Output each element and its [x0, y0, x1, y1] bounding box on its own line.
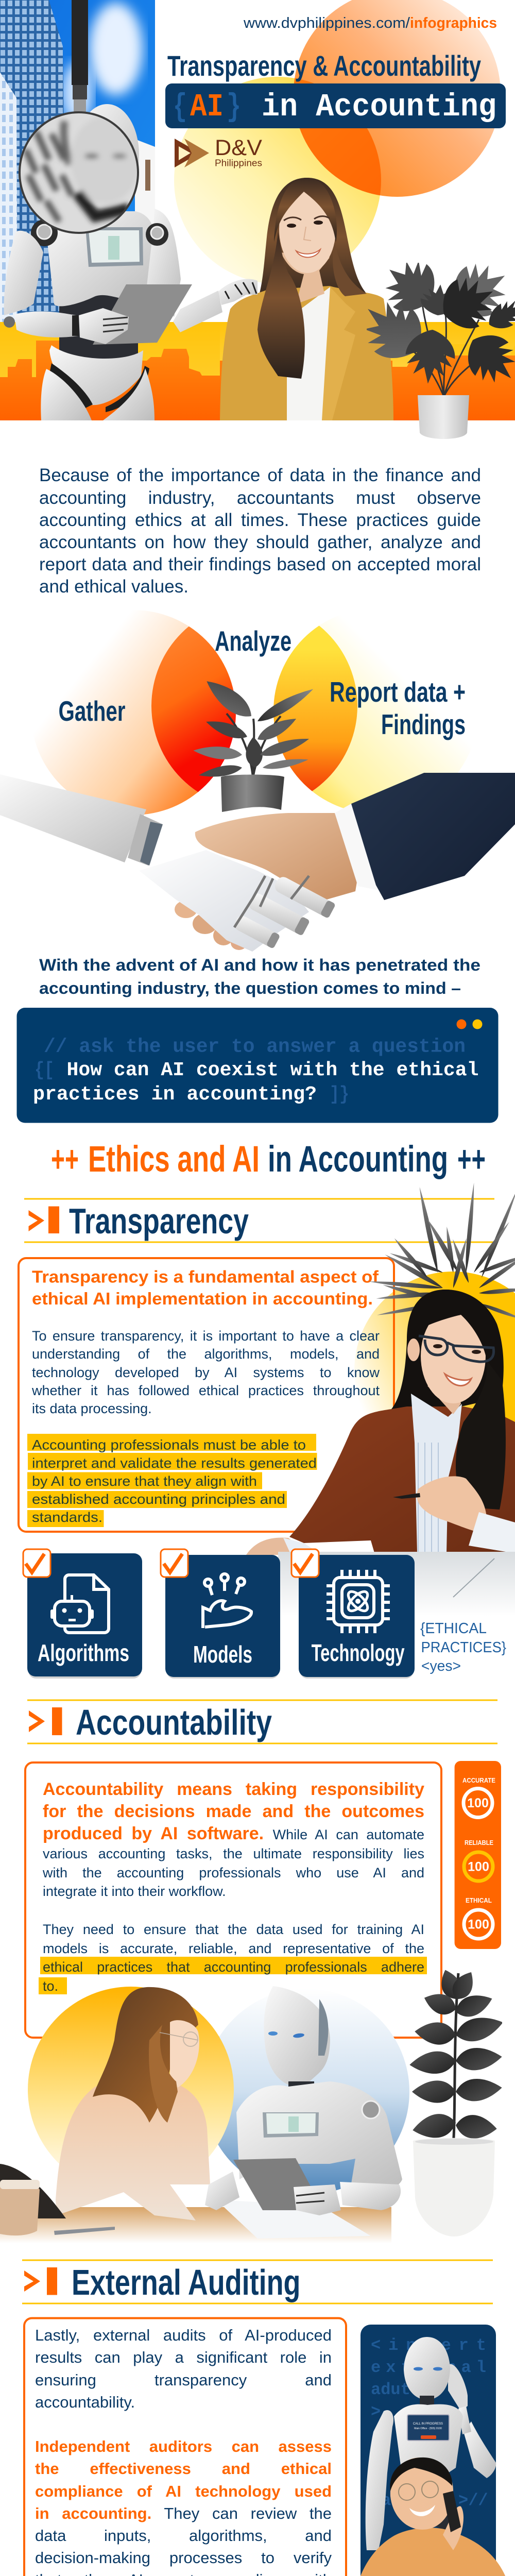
- heading: ethics and AI in accounting: Ethics and AI: [88, 1139, 260, 1180]
- intro paragraph: report data and their findings based on accepted moral: [39, 554, 481, 574]
- panel: transparency text: interpret and validate the results generated: [32, 1455, 317, 1471]
- panel: external auditing text: compliance of AI technology used: [35, 2482, 332, 2500]
- robot on phone card: Main Office - (555) 0100: [414, 2427, 442, 2430]
- robot on phone card: >: [371, 2402, 381, 2421]
- panel: external auditing text: results can play a significant role in: [35, 2348, 332, 2366]
- card: models: Models: [193, 1641, 252, 1668]
- question code box: How can AI coexist with the ethical: [67, 1059, 478, 1081]
- note: ethical practices yes: PRACTICES}: [421, 1639, 506, 1656]
- magnifying glass: [19, 0, 139, 234]
- question lead-in: accounting industry, the question comes to mind –: [39, 979, 461, 997]
- label: report data + findings: [330, 676, 466, 740]
- section heading: external auditing: [21, 2258, 494, 2306]
- hero robot with tablet: [4, 104, 258, 420]
- panel: accountability text: produced by AI software. While AI can automate: [43, 1824, 424, 1843]
- robot on phone card: e x t e r n a l: [371, 2358, 486, 2377]
- section heading: transparency: [24, 1198, 494, 1243]
- intro paragraph: accounting industry, accountants must observe: [39, 487, 481, 508]
- robot on phone card: CALL IN PROGRESS: [413, 2422, 443, 2426]
- panel: accountability text: for the decisions made and the outcomes: [43, 1802, 424, 1821]
- panel: accountability text: to.: [43, 1978, 58, 1994]
- section heading: external auditing: External Auditing: [72, 2262, 301, 2302]
- hero monstera plant in pot: [367, 263, 515, 439]
- hero photo: city sky and buildings: [0, 0, 155, 322]
- panel: transparency text: [18, 1257, 395, 1533]
- question code box: practices in accounting?: [33, 1083, 317, 1106]
- logo: D&V Philippines: [175, 137, 262, 168]
- venn circles: gather, analyze, report: [36, 611, 468, 815]
- panel: external auditing text: accountability.: [35, 2393, 135, 2411]
- handshake: robot and human: [0, 773, 515, 952]
- panel: external auditing text: in accounting. They can review the: [35, 2504, 332, 2522]
- note: ethical practices yes: {ETHICAL: [420, 1620, 487, 1637]
- website url: infographics: [410, 15, 497, 31]
- robot on phone card: >//: [458, 2491, 488, 2510]
- robot on phone card: a: [381, 2491, 391, 2510]
- section heading: accountability: Accountability: [76, 1702, 272, 1742]
- title: in Accounting: [262, 89, 496, 125]
- panel: accountability text: They need to ensure that the data used for training AI: [43, 1922, 424, 1937]
- card: models: [160, 1549, 280, 1679]
- note: ethical practices yes: [420, 1620, 506, 1674]
- woman with glasses and pen: [246, 1290, 515, 1555]
- question lead-in: With the advent of AI and how it has penetrated the: [39, 956, 480, 974]
- panel: external auditing text: data inputs, algorithms, and: [35, 2527, 332, 2545]
- robot on phone card: < i n s e r t: [371, 2336, 486, 2355]
- orange scorecard: accurate, reliable, ethical: RELIABLE: [465, 1839, 493, 1846]
- orange scorecard: accurate, reliable, ethical: ACCURATE: [462, 1776, 495, 1784]
- robot on phone card: adutor: [371, 2380, 430, 2399]
- panel: external auditing text: decision-making processes to verify: [35, 2549, 332, 2567]
- panel: external auditing text: ensuring transparency and: [35, 2371, 332, 2389]
- spiky plant behind woman: [369, 1183, 515, 1318]
- intro paragraph: [39, 465, 481, 597]
- intro paragraph: and ethical values.: [39, 577, 188, 597]
- panel: accountability text: Accountability means taking responsibility: [43, 1780, 424, 1799]
- panel: transparency text: whether it has followed ethical practices throughout: [32, 1383, 380, 1398]
- card: algorithms: [23, 1549, 142, 1679]
- gradient circles behind woman and robot: [28, 1987, 409, 2191]
- panel: external auditing text: the effectiveness and ethical: [35, 2460, 332, 2478]
- panel: transparency text: Transparency is a fundamental aspect of: [32, 1267, 379, 1286]
- yellow circle behind woman: [354, 1272, 515, 1422]
- intro paragraph: accountants on how they should gather, analyze and: [39, 532, 481, 552]
- desk with woman and robot: [0, 1984, 407, 2246]
- desk: [278, 1552, 515, 1602]
- panel: accountability text: models is accurate, reliable, and representative of the: [43, 1941, 424, 1956]
- title: {: [173, 89, 187, 125]
- heading: ethics and AI in accounting: ++: [51, 1139, 79, 1180]
- panel: accountability text: integrate it into their workflow.: [43, 1884, 226, 1899]
- heading: ethics and AI in accounting: [51, 1139, 486, 1180]
- panel: transparency text: technology developed by AI systems to know: [32, 1365, 380, 1380]
- skyline band: [0, 322, 515, 420]
- panel: transparency text: standards.: [32, 1510, 102, 1525]
- title: [165, 52, 506, 128]
- panel: accountability text: [24, 1761, 442, 2039]
- website url: www.dvphilippines.com/: [243, 15, 410, 31]
- orange scorecard: accurate, reliable, ethical: 100: [468, 1918, 489, 1932]
- panel: accountability text: various accounting tasks, the ultimate responsibility lies: [43, 1846, 424, 1861]
- orange scorecard: accurate, reliable, ethical: [454, 1761, 501, 1949]
- title: }: [227, 89, 241, 125]
- panel: transparency text: its data processing.: [32, 1401, 152, 1416]
- intro paragraph: Because of the importance of data in the finance and: [39, 465, 481, 485]
- panel: transparency text: established accounting principles and: [32, 1492, 285, 1507]
- section heading: transparency: Transparency: [69, 1201, 249, 1241]
- panel: transparency text: ethical AI implementation in accounting.: [32, 1289, 373, 1308]
- question code box: // ask the user to answer a question: [44, 1036, 466, 1058]
- panel: transparency text: understanding of the algorithms, models, and: [32, 1346, 380, 1362]
- question code box: [16, 1008, 499, 1123]
- title: AI: [190, 89, 224, 125]
- fiddle leaf plant in pot: [404, 1965, 502, 2239]
- question lead-in: [39, 956, 480, 997]
- website url: [243, 15, 497, 31]
- panel: accountability text: ethical practices that accounting professionals adhere: [43, 1959, 424, 1975]
- question code box: {[: [35, 1059, 54, 1081]
- hero woman: [220, 178, 393, 420]
- card: technology: [290, 1549, 415, 1679]
- panel: transparency text: by AI to ensure that they align with: [32, 1473, 257, 1489]
- panel: transparency text: To ensure transparency, it is important to have a clear: [32, 1328, 380, 1344]
- panel: external auditing text: [23, 2317, 347, 2576]
- panel: external auditing text: Independent auditors can assess: [35, 2437, 332, 2455]
- panel: transparency text: Accounting professionals must be able to: [32, 1437, 306, 1453]
- orange scorecard: accurate, reliable, ethical: 100: [468, 1860, 489, 1874]
- orange scorecard: accurate, reliable, ethical: ETHICAL: [466, 1896, 492, 1904]
- robot on phone card: [360, 2325, 515, 2576]
- question code box: ]}: [330, 1083, 349, 1106]
- orange scorecard: accurate, reliable, ethical: 100: [467, 1796, 489, 1810]
- panel: accountability text: with the accounting professionals who use AI and: [43, 1865, 424, 1880]
- section heading: accountability: [27, 1699, 497, 1744]
- potted plant on hand: [194, 681, 313, 812]
- intro paragraph: accounting ethics at all times. These practices guide: [39, 510, 481, 530]
- panel: external auditing text: Lastly, external audits of AI-produced: [35, 2326, 332, 2344]
- hero gradient circles: [174, 0, 501, 282]
- note: ethical practices yes: <yes>: [421, 1658, 461, 1674]
- logo: D&V Philippines: Philippines: [215, 158, 262, 168]
